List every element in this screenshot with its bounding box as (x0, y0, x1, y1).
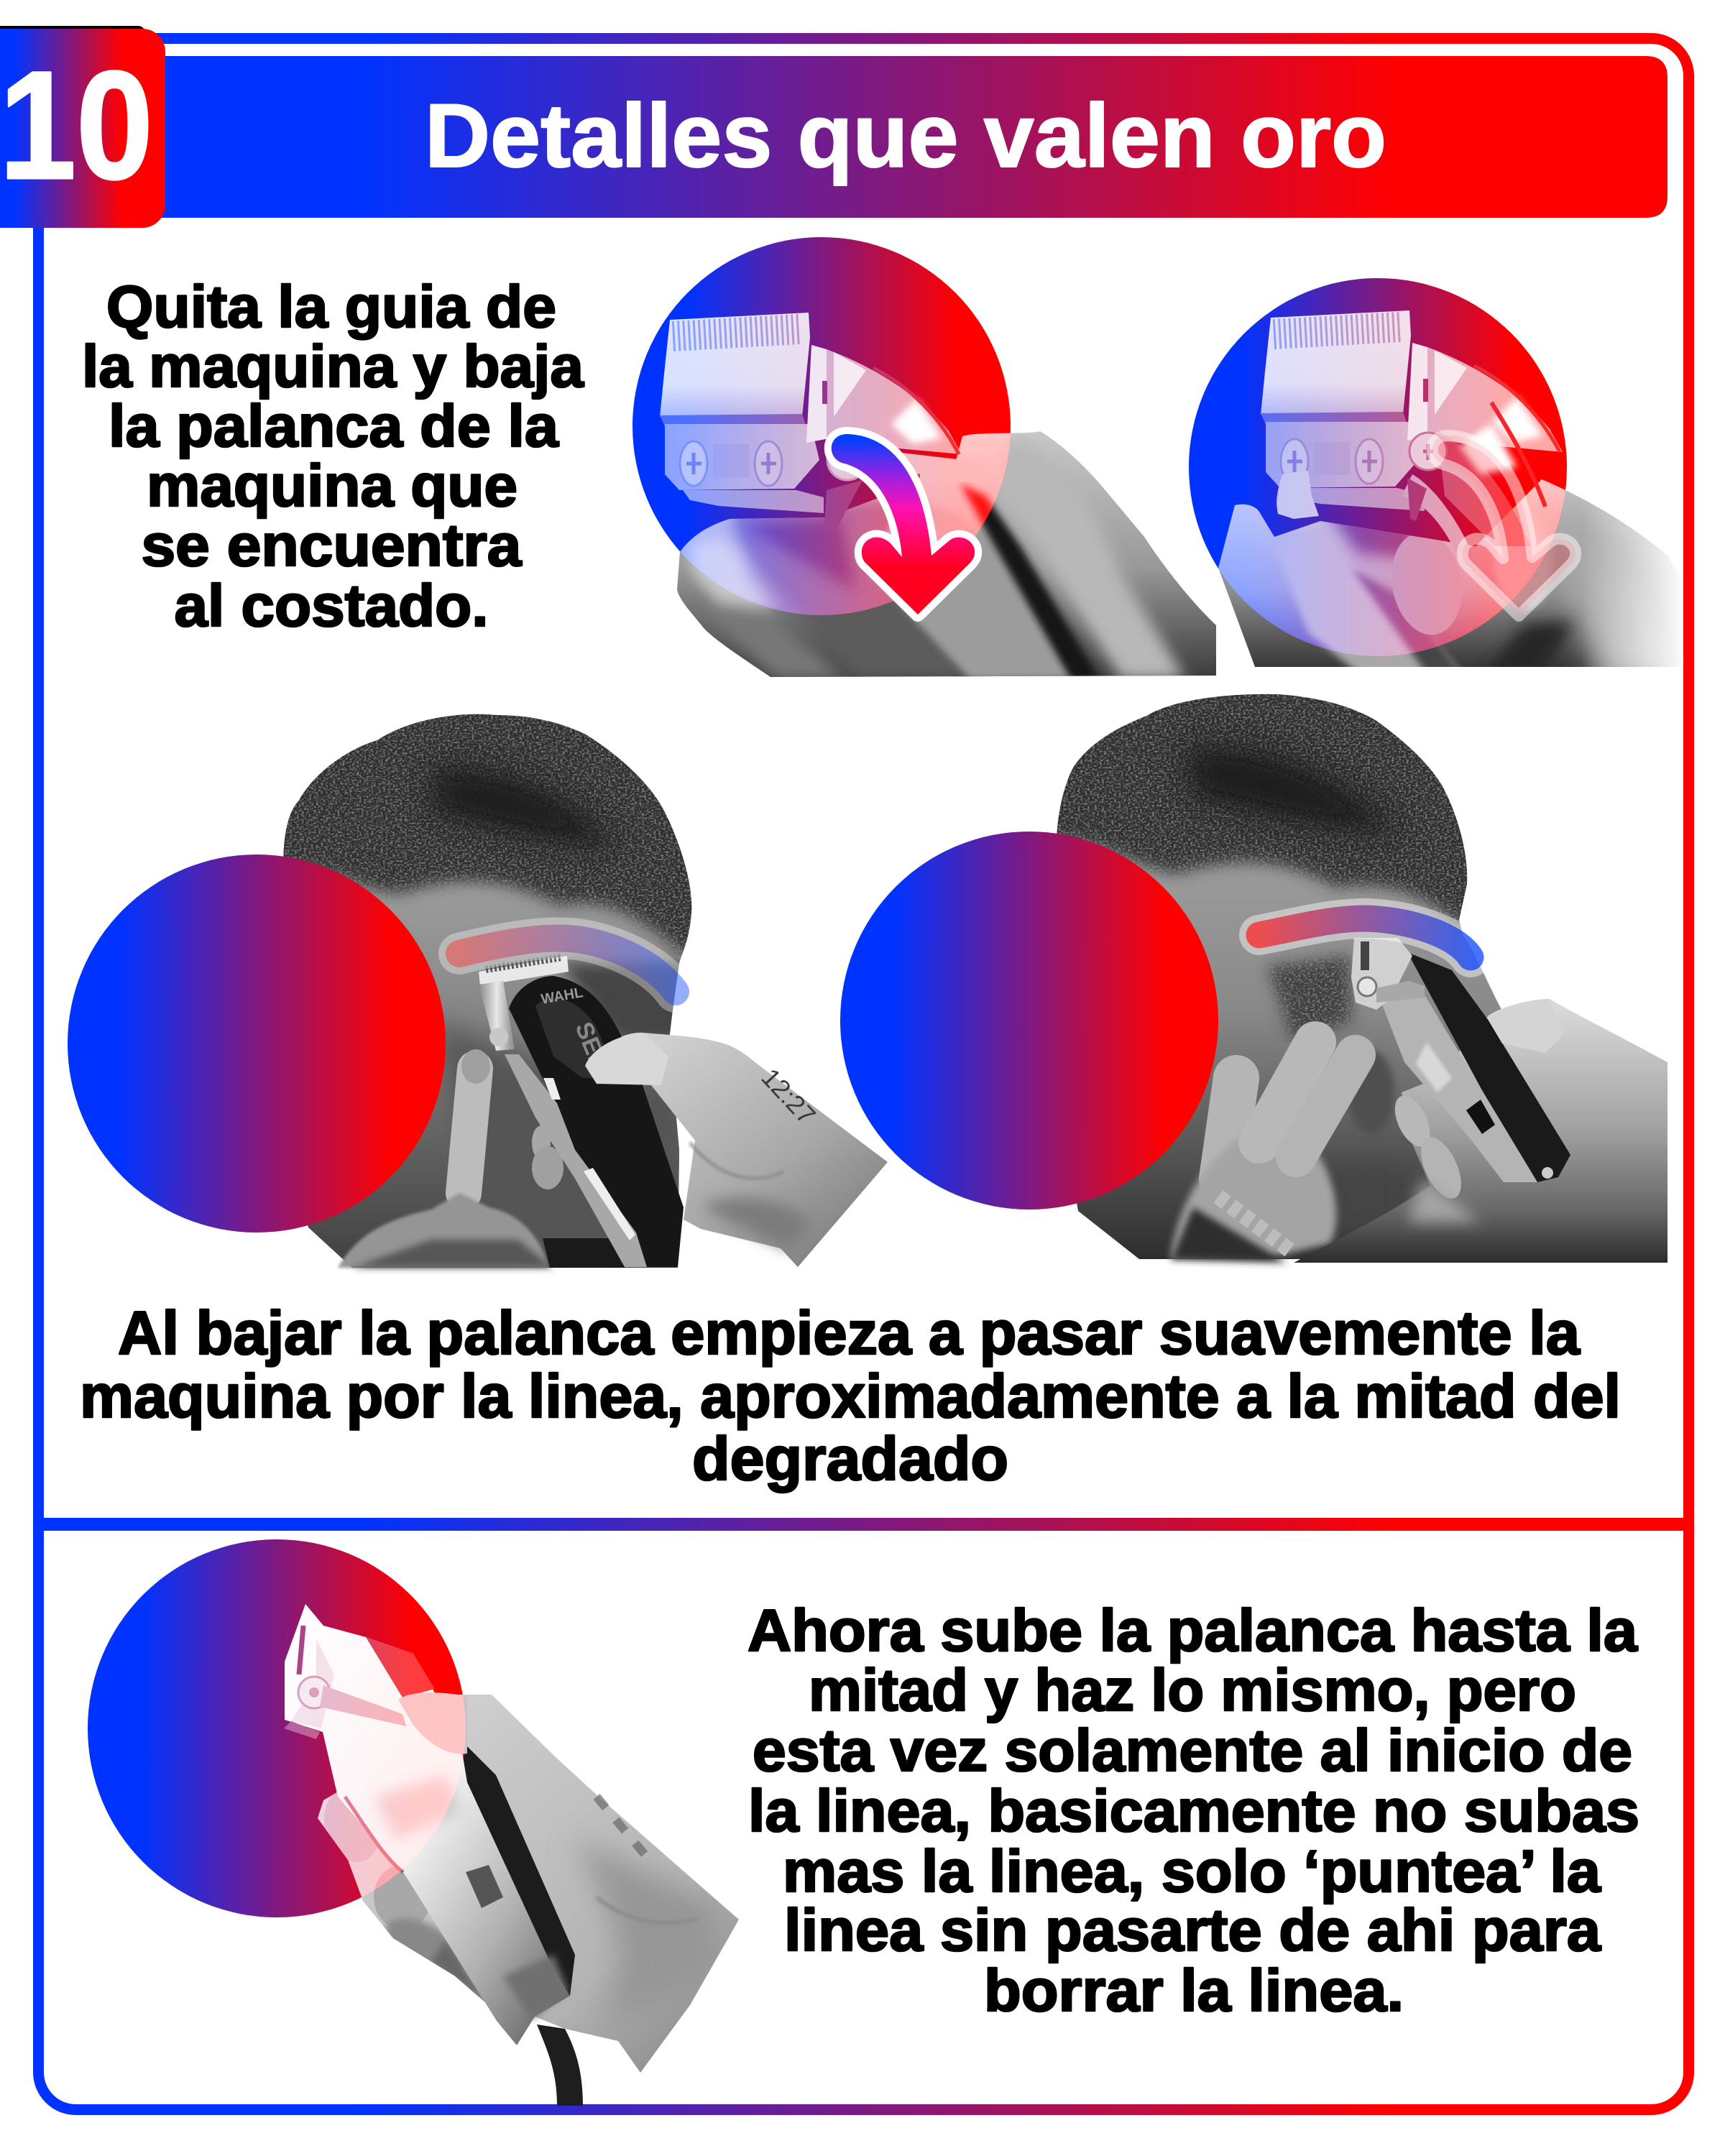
gradient circle over right head (840, 831, 1218, 1210)
fingers on neck, right (1170, 1042, 1356, 1263)
fingers on neck (338, 1049, 564, 1268)
photo: clipper close-up with lever lowered and gradient circle (1189, 278, 1683, 679)
hand (316, 1695, 739, 2073)
text block: lower lever: Al bajar la palanca empieza a pasar suavemente la (118, 1299, 1581, 1368)
text block: lower lever: maquina por la linea, aproximadamente a la mitad del (80, 1363, 1621, 1431)
gradient circle over left head (68, 854, 446, 1233)
thumb over clipper (585, 1033, 668, 1085)
step badge (0, 26, 165, 228)
hand with tattoo (585, 1033, 888, 1267)
text block: raise lever (748, 1597, 1639, 2024)
text block: raise lever: linea sin pasarte de ahi para (784, 1897, 1601, 1963)
gradient circle, second close-up (1189, 278, 1567, 656)
photo: clipper close-up with lever and gradient circle (632, 237, 1216, 679)
step number: 10 (0, 40, 153, 211)
hand holding clipper, right (1294, 999, 1668, 1263)
thumb over clipper (398, 1692, 467, 1754)
head and hair, right (1057, 694, 1501, 1259)
text block: remove guide: al costado. (174, 572, 489, 639)
text block: remove guide: se encuentra (141, 512, 522, 579)
thumb over clipper, right (1489, 999, 1563, 1053)
text block: raise lever: borrar la linea. (984, 1957, 1404, 2024)
cord (537, 2024, 583, 2106)
wrist tattoo marks (597, 1797, 650, 1861)
guide line on neck (459, 938, 676, 992)
text block: raise lever: mitad y haz lo mismo, pero (809, 1657, 1576, 1723)
guide line on neck, right (1259, 918, 1471, 957)
clipper with black body (479, 956, 684, 1267)
text block: raise lever: esta vez solamente al inicio de (753, 1717, 1632, 1784)
gradient circle, bottom panel (88, 1539, 466, 1917)
arrow: ghost of lever movement (1432, 436, 1576, 616)
text block: remove guide (82, 273, 584, 639)
arrow: lever moves down (832, 434, 975, 614)
divider (36, 1518, 1690, 1531)
collar (543, 1238, 625, 1268)
clipper blade, plate and lever (660, 313, 986, 535)
text block: raise lever: Ahora sube la palanca hasta la (748, 1597, 1638, 1664)
photo: head with clipper, left (266, 690, 888, 1272)
text block: remove guide: la palanca de la (109, 392, 559, 459)
tattoo: 12:27 (755, 1063, 822, 1130)
head and hair, left (283, 714, 691, 1268)
clipper model lettering: SEN (570, 1018, 614, 1075)
text block: raise lever: la linea, basicamente no subas (748, 1777, 1639, 1844)
hand holding clipper, first close-up (677, 431, 1216, 679)
photo: head with clipper, right (1042, 676, 1668, 1265)
text block: remove guide: Quita la guia de (106, 273, 556, 340)
clipper brand lettering: WAHL (540, 985, 584, 1008)
photo: hand holding clipper with gradient circle (88, 1539, 739, 2106)
text block: lower lever (80, 1299, 1621, 1493)
text block: remove guide: la maquina y baja (82, 333, 584, 400)
hand holding clipper, second close-up (1218, 479, 1683, 679)
text block: raise lever: mas la linea, solo ‘puntea’ la (783, 1838, 1601, 1904)
fade of hand at right edge (1581, 474, 1685, 670)
clipper body (284, 1604, 575, 2045)
text block: remove guide: maquina que (147, 452, 518, 519)
clipper, right (1351, 938, 1570, 1182)
clipper blade, plate and pivot (1261, 310, 1563, 575)
gradient circle, first close-up (632, 237, 1011, 615)
text block: lower lever: degradado (692, 1425, 1008, 1493)
title: Detalles que valen oro (425, 86, 1386, 186)
title bar (0, 56, 1668, 218)
